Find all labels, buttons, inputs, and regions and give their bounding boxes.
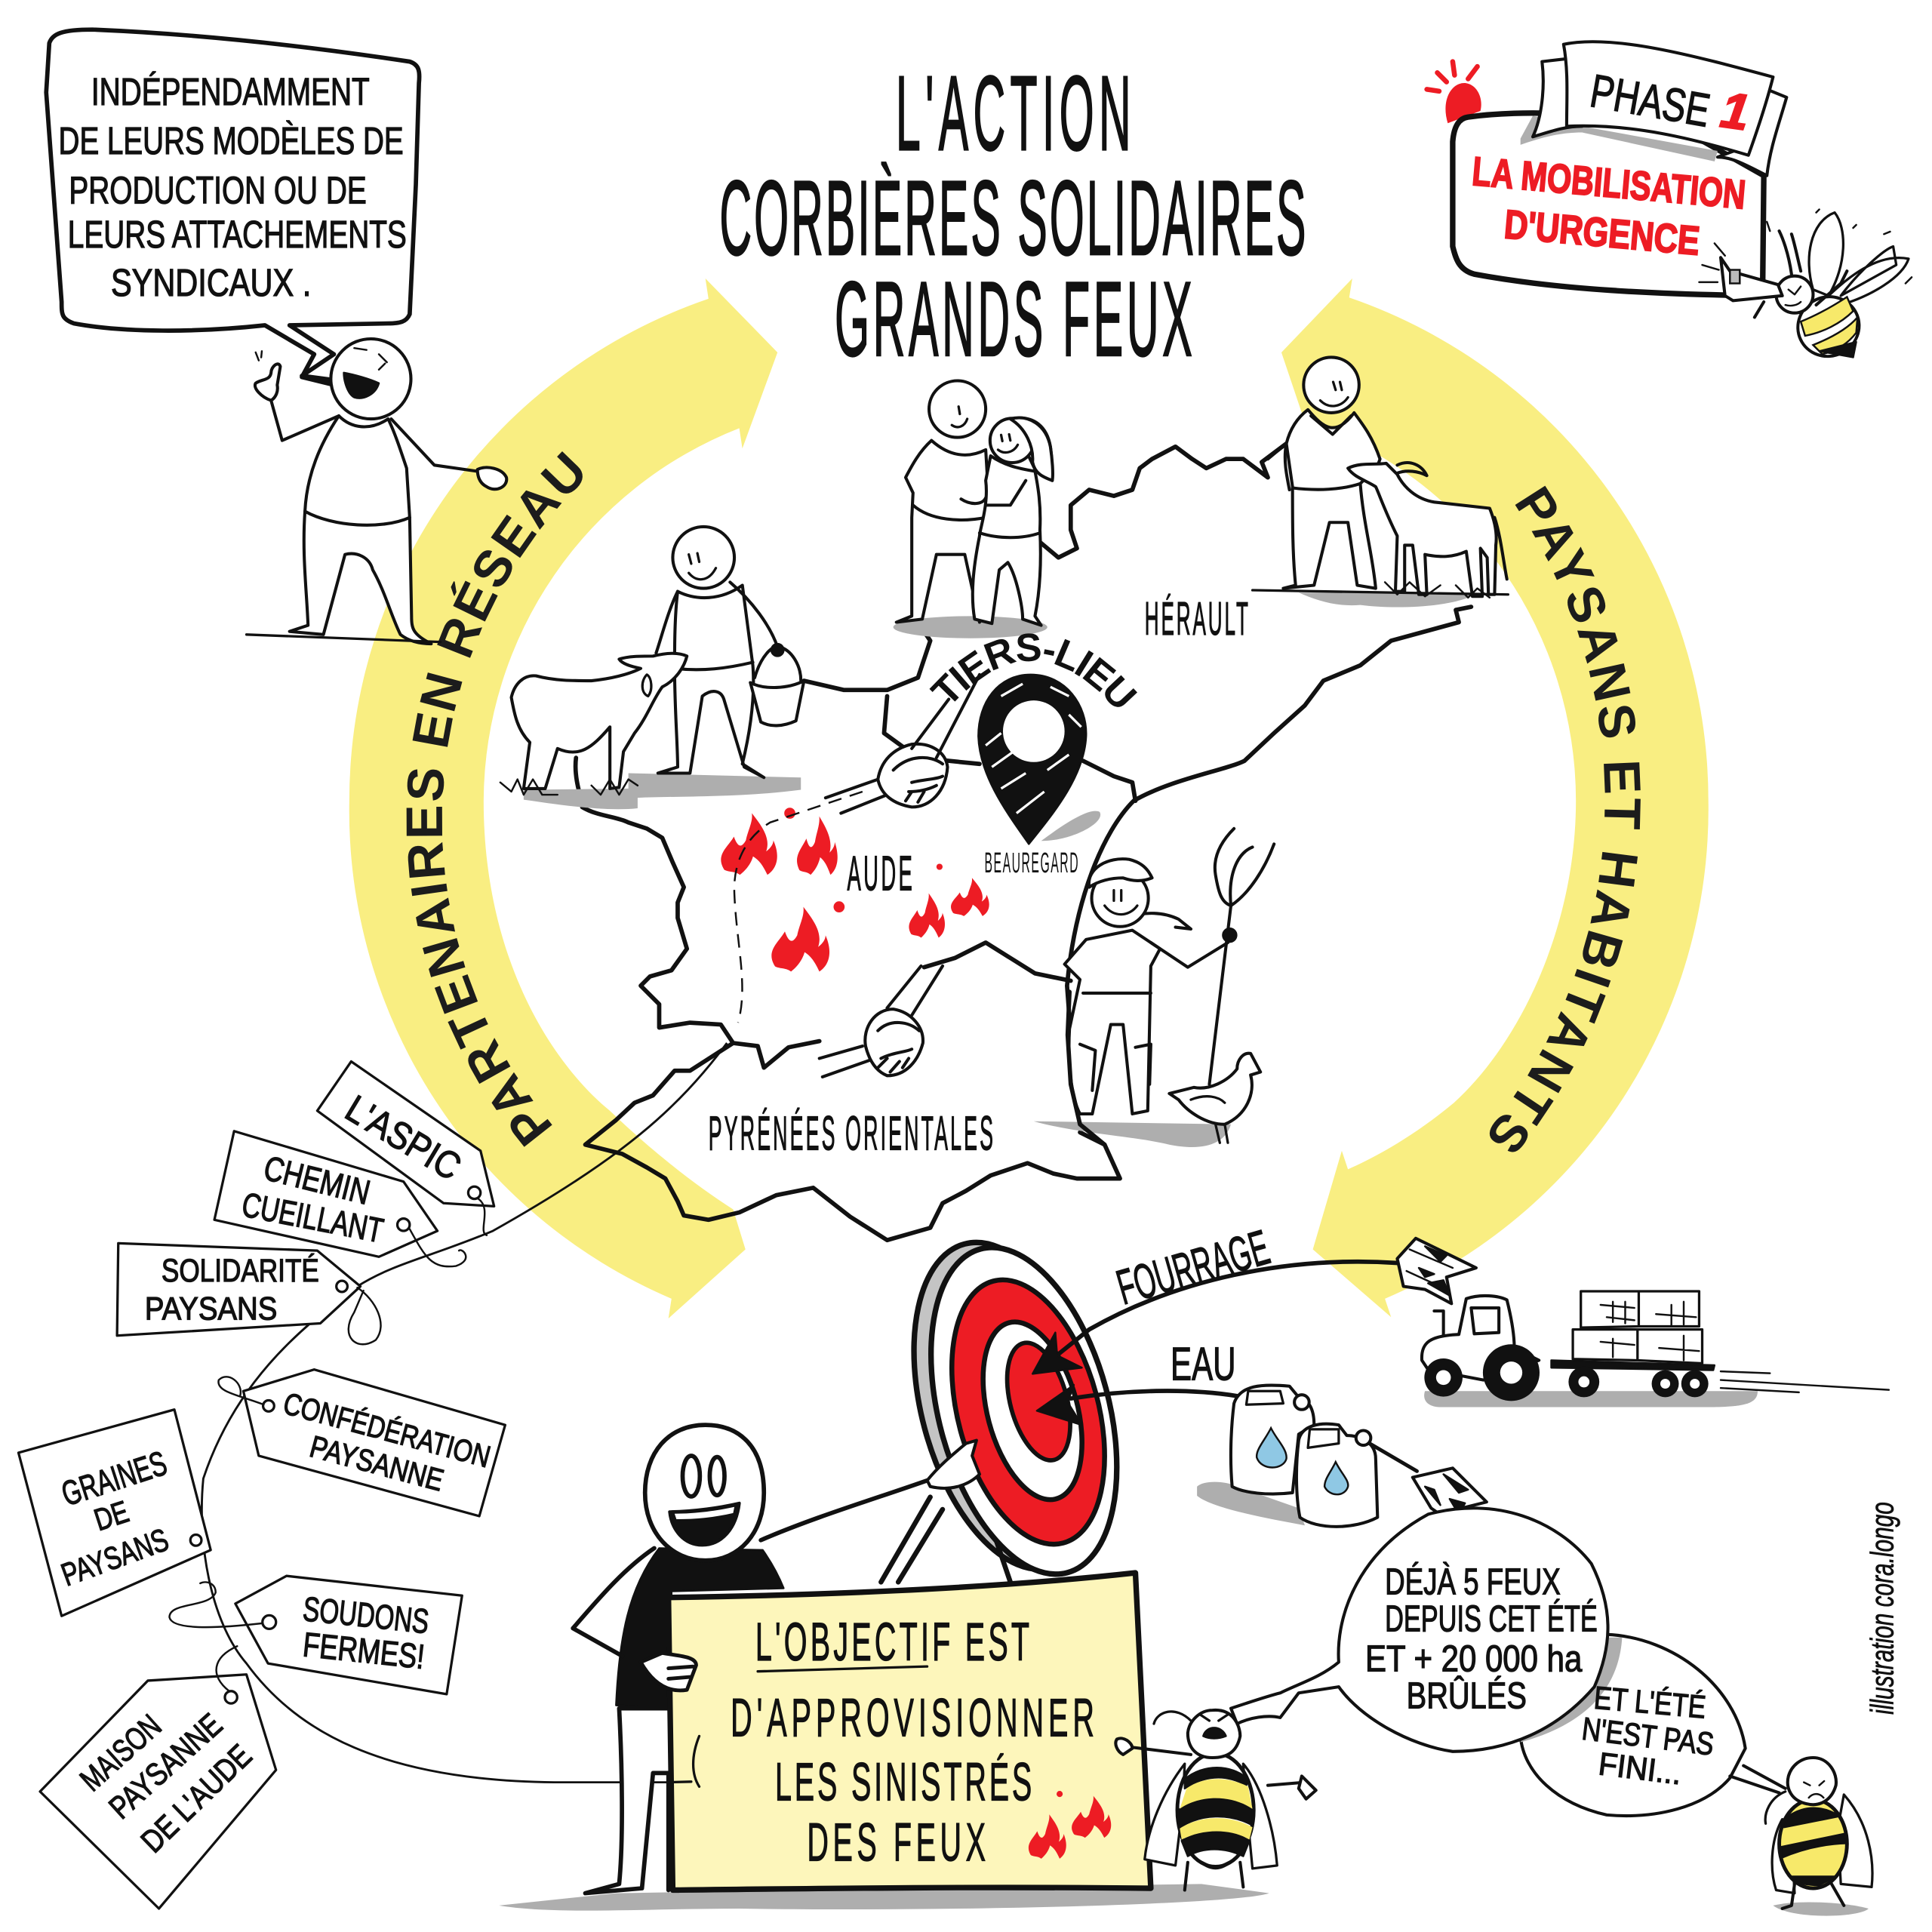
target stand [881, 1497, 1011, 1582]
pin shadow [1041, 811, 1100, 841]
bubble: déjà 5 feux: DEPUIS CET ÉTÉ [1385, 1599, 1598, 1640]
couple shadow [894, 616, 1048, 638]
siren [1427, 62, 1481, 123]
small bubble: et l'été: FINI... [1597, 1746, 1684, 1791]
tag: Chemin Cueillant: CUEILLANT [238, 1185, 386, 1251]
panel: phase 1: PHASE [1586, 65, 1714, 137]
right yellow arrow: paysans et habitants [1281, 278, 1709, 1318]
tag: Maison Paysanne de l'Aude: MAISON [73, 1708, 168, 1798]
small bubble: et l'été [1521, 1635, 1786, 1816]
tractor and bales [1422, 1291, 1889, 1407]
panel: phase 1 [1427, 42, 1786, 296]
map label: Hérault: HÉRAULT [1145, 593, 1248, 645]
small bubble: et l'été: N'EST PAS [1580, 1711, 1716, 1762]
sad small bee [1765, 1758, 1872, 1916]
tag: Soudons Fermes: SOUDONS [301, 1589, 431, 1641]
map label: Beauregard: BEAUREGARD [984, 848, 1078, 879]
hen [1169, 1054, 1260, 1124]
pointing hand on target [928, 1441, 980, 1488]
panel: phase 1: LA MOBILISATION [1470, 149, 1747, 218]
speech bubble: indépendamment: LEURS ATTACHEMENTS [68, 213, 407, 256]
tag: Soudons Fermes [169, 1576, 462, 1694]
coast line over the farmer [1068, 992, 1105, 1145]
character pointing at target [499, 1425, 1269, 1911]
tractor shadow [1424, 1391, 1758, 1407]
flames on sign [1029, 1791, 1111, 1859]
water cans [1197, 1385, 1487, 1527]
map label: Aude: AUDE [847, 846, 912, 901]
handshake: top [826, 675, 980, 814]
speech bubble: indépendamment: INDÉPENDAMMENT [91, 70, 370, 113]
tag: Graines de Paysans: PAYSANS [57, 1521, 173, 1592]
speech bubble: indépendamment: PRODUCTION OU DE [69, 168, 367, 211]
map of the territory [576, 444, 1471, 1240]
bubble: déjà 5 feux: ET + 20 000 ha [1365, 1639, 1583, 1680]
panel: objective: LES SINISTRÉS [775, 1752, 1032, 1812]
tag: Solidarité Paysans: PAYSANS [145, 1291, 277, 1327]
small bubble: et l'été: ET L'ÉTÉ [1592, 1680, 1707, 1725]
panel: objective: DES FEUX [807, 1813, 986, 1872]
dashed route and partner string [202, 792, 863, 1783]
bubble: déjà 5 feux: BRÛLÉS [1407, 1676, 1527, 1717]
character: farmer with pitchfork and hen [1034, 829, 1274, 1147]
title [719, 54, 1306, 378]
speech bubble: indépendamment [46, 29, 420, 387]
label and arrow: fourrage [1032, 1220, 1476, 1374]
string end on sign [669, 1736, 700, 1786]
map label: Pyrénées Orientales: PYRÉNÉES ORIENTALES [709, 1107, 993, 1161]
bee with megaphone [1699, 210, 1912, 366]
panel: phase 1: D'URGENCE [1503, 202, 1702, 264]
can shadow [1197, 1482, 1305, 1525]
farmer shadow [1034, 1121, 1231, 1147]
panel: objective: D'APPROVISIONNER [731, 1688, 1094, 1749]
partner tags [18, 1062, 505, 1909]
tag: Confédération Paysanne [218, 1370, 505, 1516]
bee crying, at sign [1115, 1710, 1316, 1890]
tag: L'Aspic [317, 1062, 494, 1235]
tag: Maison Paysanne de l'Aude [40, 1646, 276, 1909]
tag: Maison Paysanne de l'Aude: DE L'AUDE [134, 1737, 258, 1860]
credit: illustration cora.longo: illustration cora.longo [1865, 1502, 1900, 1715]
bucket [750, 681, 804, 725]
tag: Graines de Paysans: GRAINES [57, 1444, 171, 1513]
title: CORBIÈRES SOLIDAIRES [719, 159, 1306, 277]
tiers-lieu pin and curved label: TIERS-LIEU [930, 633, 1137, 707]
label and arrow: eau: EAU [1171, 1339, 1236, 1391]
hand holding sign [641, 1653, 696, 1690]
bubble: déjà 5 feux [1231, 1508, 1786, 1816]
tag: Chemin Cueillant [214, 1131, 466, 1266]
tiers-lieu pin and curved label [930, 633, 1137, 845]
tag: L'Aspic: L'ASPIC [338, 1087, 469, 1189]
title: L'ACTION [896, 54, 1131, 172]
speech bubble: indépendamment: DE LEURS MODÈLES DE [59, 119, 404, 162]
pitchfork [1209, 829, 1274, 1084]
title: GRANDS FEUX [835, 260, 1192, 378]
tag: Solidarité Paysans: SOLIDARITÉ [162, 1253, 319, 1288]
tag: Graines de Paysans: DE [90, 1494, 133, 1537]
character: farmer with sheep and bucket [500, 527, 804, 809]
target back [881, 1222, 1134, 1590]
tag: Solidarité Paysans [117, 1243, 381, 1344]
panel: phase 1: 1 [1717, 82, 1753, 141]
speech bubble: indépendamment: SYNDICAUX . [111, 261, 311, 304]
sheep [512, 654, 687, 789]
flames on the map [721, 808, 989, 971]
left yellow arrow: partenaires en réseau [349, 278, 777, 1318]
label and arrow: eau [1037, 1339, 1237, 1425]
character: farmer with goat [1253, 357, 1508, 608]
goat shadow [1299, 592, 1478, 608]
arc label: partenaires en réseau: PARTENAIRES EN RÉSEAU [406, 451, 583, 1147]
arc label: paysans et habitants: PAYSANS ET HABITANTS [1490, 486, 1641, 1152]
target [881, 1222, 1149, 1595]
tag: Chemin Cueillant: CHEMIN [260, 1149, 374, 1212]
tag: Maison Paysanne de l'Aude: PAYSANNE [102, 1706, 229, 1826]
bubble: déjà 5 feux: DÉJÀ 5 FEUX [1385, 1562, 1561, 1603]
character: couple [894, 380, 1053, 638]
tag: Soudons Fermes: FERMES! [301, 1626, 426, 1676]
character: speaker with raised finger [247, 339, 506, 644]
panel: objective: L'OBJECTIF EST [755, 1613, 1029, 1672]
tag: Confédération Paysanne: CONFÉDÉRATION [280, 1386, 494, 1474]
tag: Confédération Paysanne: PAYSANNE [306, 1429, 448, 1498]
tag: Graines de Paysans [18, 1410, 211, 1616]
label and arrow: fourrage: FOURRAGE [1111, 1220, 1275, 1315]
handshake: bottom [820, 966, 943, 1077]
ground shadow [524, 773, 801, 809]
panel: objective [641, 1573, 1151, 1890]
